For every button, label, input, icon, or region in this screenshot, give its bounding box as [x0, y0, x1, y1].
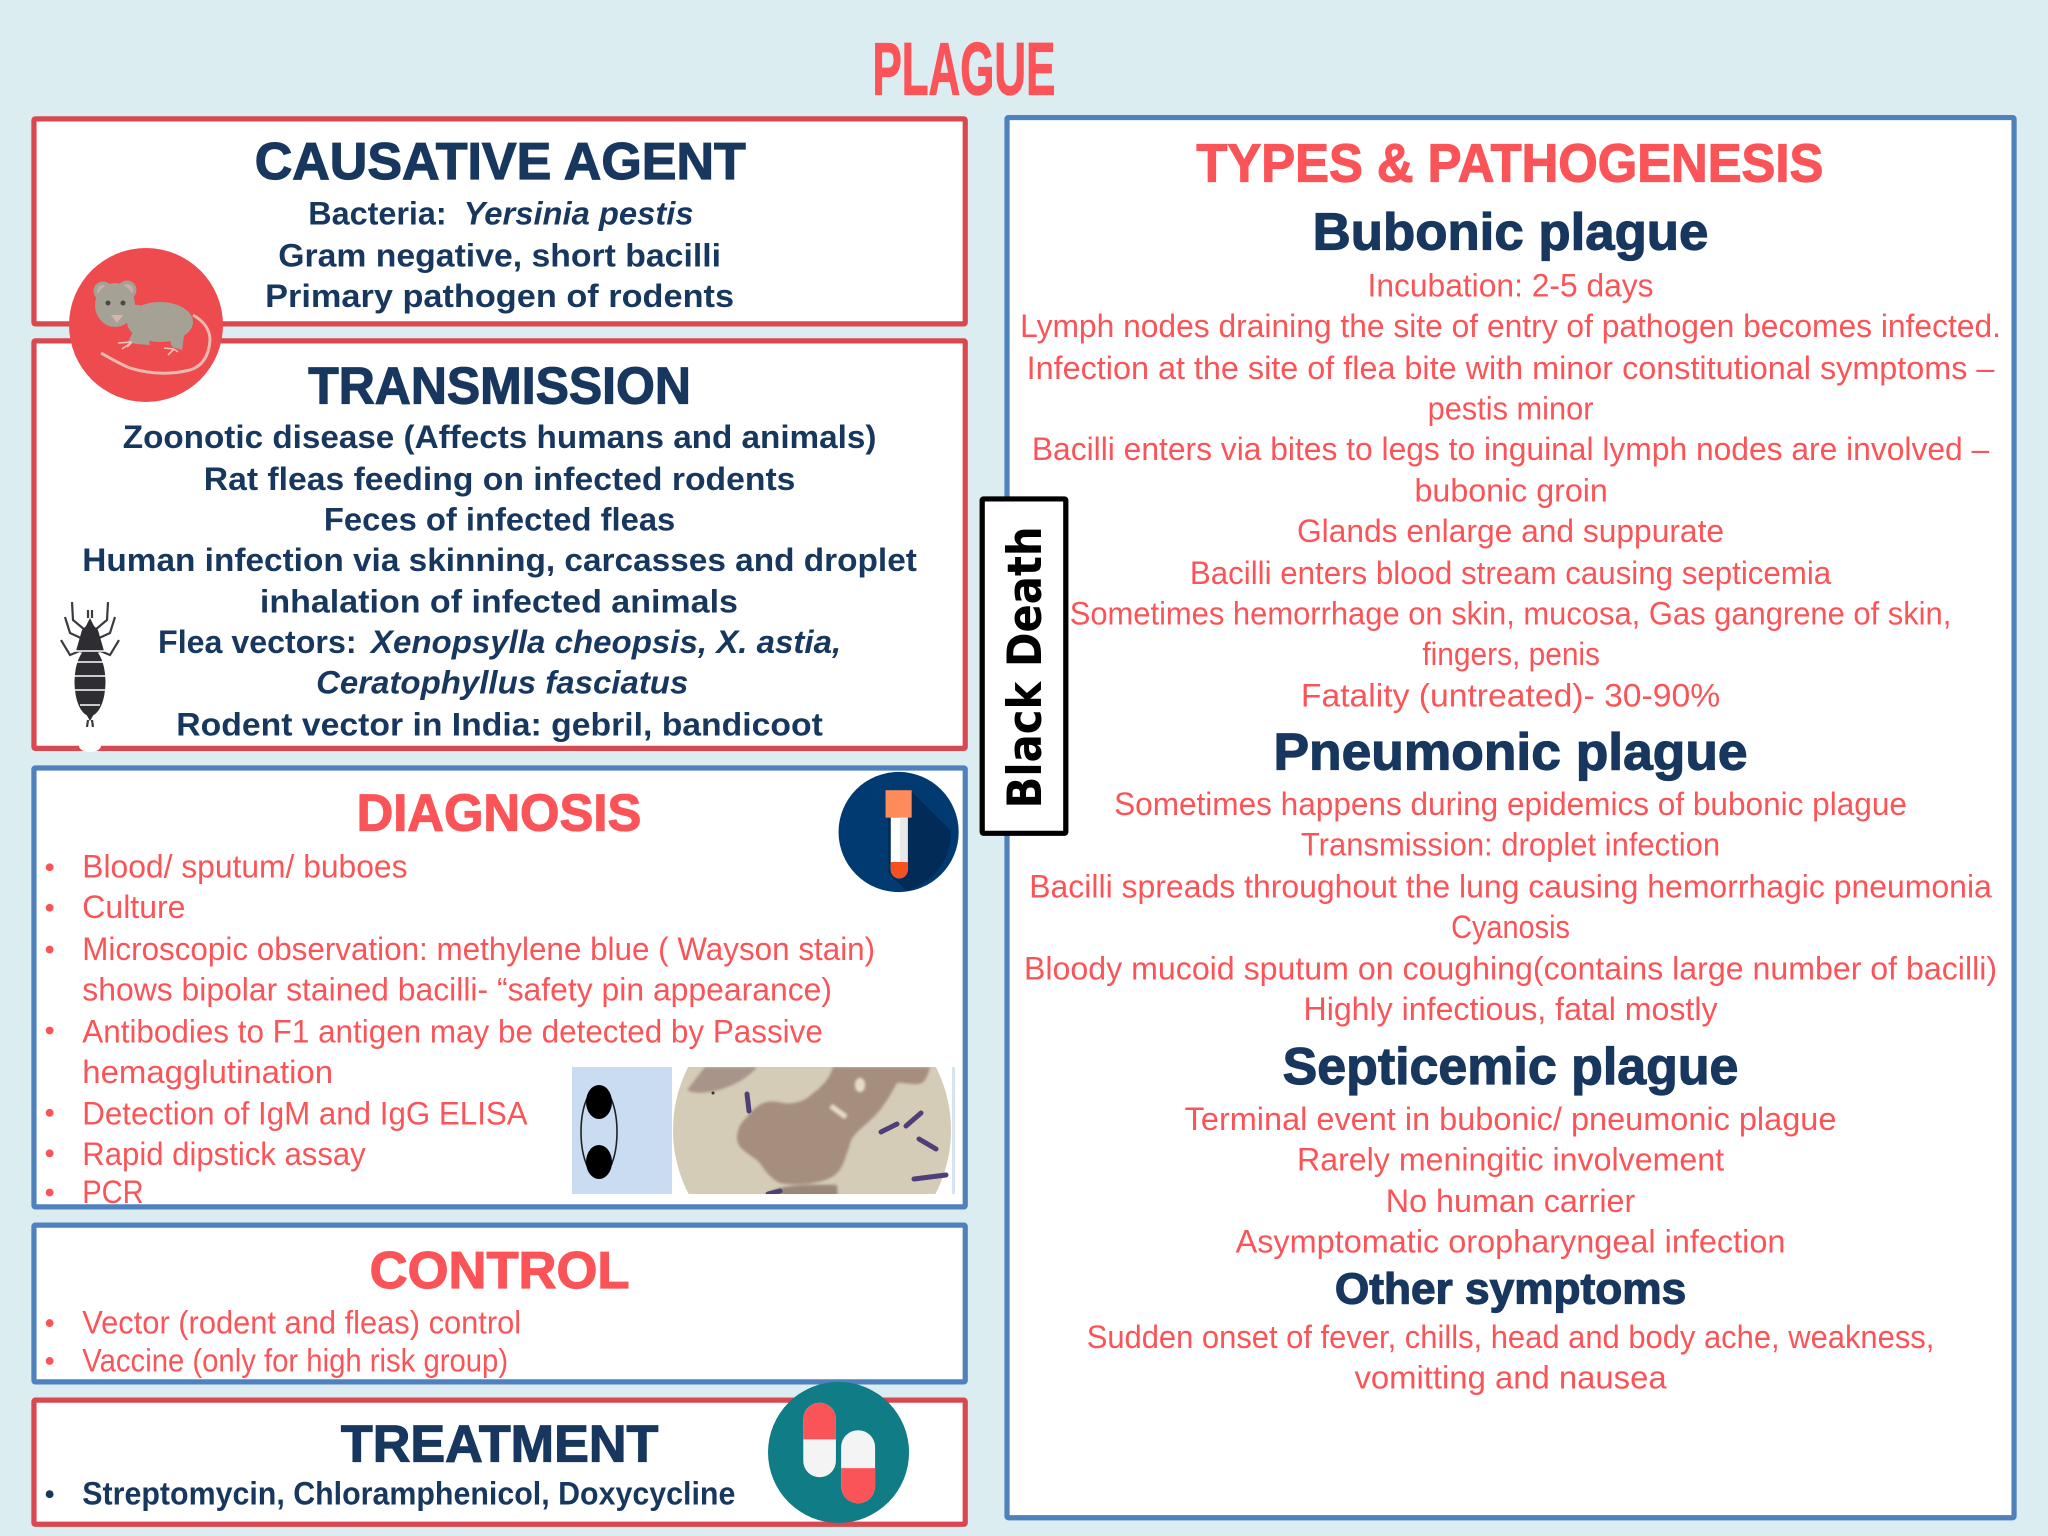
text: pneumonic plague details: Highly infectious, fatal mostly — [1304, 990, 1718, 1027]
text: bubonic plague details: pestis minor — [1428, 389, 1594, 426]
list: diagnostic methods — [46, 848, 875, 1210]
text: transmission details: Xenopsylla cheopsis, X. astia, — [369, 623, 841, 660]
list: diagnostic methods: Culture — [82, 888, 185, 925]
icon: flea — [61, 602, 119, 752]
text: transmission details: Flea vectors: — [158, 623, 357, 660]
panel: control — [34, 1225, 965, 1382]
label: black death: Black Death — [998, 526, 1053, 808]
text: septicemic plague details — [1185, 1100, 1836, 1260]
text: bubonic plague details — [1020, 266, 2001, 714]
text: bubonic plague details: Lymph nodes draining the site of entry of pathogen becomes infected. — [1020, 307, 2001, 344]
subheading: pneumonic plague: Pneumonic plague — [1273, 723, 1748, 781]
text: septicemic plague details: Asymptomatic oropharyngeal infection — [1236, 1223, 1785, 1260]
icon: mouse — [69, 248, 223, 402]
text: transmission details: Ceratophyllus fasciatus — [316, 664, 688, 701]
list: diagnostic methods: Blood/ sputum/ buboes — [82, 848, 408, 885]
text: bubonic plague details: fingers, penis — [1422, 635, 1600, 672]
text: other symptoms details: Sudden onset of fever, chills, head and body ache, weakness, — [1087, 1318, 1934, 1355]
text: transmission details: Human infection via skinning, carcasses and droplet — [82, 541, 917, 578]
text: pneumonic plague details: Sometimes happens during epidemics of bubonic plague — [1114, 785, 1907, 822]
text: causative agent details: Primary pathogen of rodents — [265, 277, 734, 314]
panel: diagnosis — [31, 765, 968, 1210]
text: bubonic plague details: Bacilli enters via bites to legs to inguinal lymph nodes are involved – — [1032, 430, 1990, 467]
text: causative agent details: Yersinia pestis — [464, 195, 694, 232]
text: causative agent details — [265, 195, 734, 314]
text: pneumonic plague details: Transmission: droplet infection — [1301, 826, 1720, 863]
panel: causative agent — [34, 119, 965, 324]
text: transmission details: Feces of infected fleas — [324, 500, 675, 537]
text: transmission details: Zoonotic disease (Affects humans and animals) — [123, 418, 876, 455]
image: safety pin diagram — [572, 1067, 672, 1194]
text: pneumonic plague details: Bloody mucoid sputum on coughing(contains large number of bacilli) — [1024, 950, 1997, 987]
title: PLAGUE — [872, 28, 1055, 111]
text: septicemic plague details: Terminal event in bubonic/ pneumonic plague — [1185, 1100, 1836, 1137]
panel: types and pathogenesis — [1007, 118, 2014, 1518]
heading: diagnosis: DIAGNOSIS — [357, 785, 641, 843]
heading: causative agent: CAUSATIVE AGENT — [255, 133, 746, 191]
subheading: bubonic plague: Bubonic plague — [1313, 203, 1708, 261]
section: other symptoms — [1087, 1266, 1934, 1395]
heading: transmission: TRANSMISSION — [308, 358, 691, 416]
list: control measures: Vaccine (only for high risk group) — [82, 1341, 508, 1378]
list: diagnostic methods: Rapid dipstick assay — [82, 1135, 366, 1172]
panel: treatment — [34, 1382, 965, 1524]
heading: types and pathogenesis: TYPES & PATHOGENESIS — [1196, 135, 1823, 194]
text: bubonic plague details: Sometimes hemorrhage on skin, mucosa, Gas gangrene of skin, — [1070, 594, 1951, 631]
image: micrograph of bipolar stained bacilli — [673, 1067, 955, 1194]
list: treatment drugs: Streptomycin, Chloramphenicol, Doxycycline — [82, 1475, 735, 1512]
text: bubonic plague details: Bacilli enters blood stream causing septicemia — [1190, 554, 1832, 591]
section: pneumonic plague — [1024, 723, 1997, 1027]
text: bubonic plague details: Incubation: 2-5 days — [1368, 266, 1654, 303]
text: transmission details: Rat fleas feeding on infected rodents — [204, 460, 795, 497]
icon: test tube — [839, 772, 959, 892]
list: diagnostic methods: Microscopic observation: methylene blue ( Wayson stain) — [82, 930, 875, 967]
text: other symptoms details — [1087, 1318, 1934, 1395]
subheading: other symptoms: Other symptoms — [1335, 1266, 1686, 1314]
list: diagnostic methods: Antibodies to F1 antigen may be detected by Passive — [82, 1012, 823, 1049]
label: black death — [982, 499, 1066, 833]
text: bubonic plague details: Infection at the site of flea bite with minor constitutional symptoms – — [1027, 349, 1995, 386]
text: causative agent details: Bacteria: — [308, 195, 447, 232]
text: transmission details: Rodent vector in India: gebril, bandicoot — [176, 705, 823, 742]
text: causative agent details: Gram negative, short bacilli — [278, 236, 721, 273]
list: control measures: Vector (rodent and fleas) control — [82, 1304, 521, 1341]
text: pneumonic plague details — [1024, 785, 1997, 1027]
section: septicemic plague — [1185, 1038, 1836, 1260]
section: bubonic plague — [1020, 203, 2001, 714]
list: diagnostic methods: PCR — [82, 1173, 144, 1210]
text: septicemic plague details: No human carrier — [1386, 1182, 1635, 1219]
text: bubonic plague details: Glands enlarge and suppurate — [1297, 512, 1724, 549]
text: transmission details — [82, 418, 917, 742]
heading: control: CONTROL — [370, 1242, 630, 1300]
panel: transmission — [34, 341, 965, 752]
list: control measures — [46, 1304, 521, 1378]
icon: pills — [768, 1382, 909, 1523]
list: diagnostic methods: Detection of IgM and IgG ELISA — [82, 1095, 528, 1132]
heading: treatment: TREATMENT — [341, 1416, 658, 1474]
text: bubonic plague details: bubonic groin — [1415, 472, 1608, 509]
text: pneumonic plague details: Cyanosis — [1451, 908, 1570, 945]
text: pneumonic plague details: Bacilli spreads throughout the lung causing hemorrhagic pneumonia — [1029, 867, 1993, 904]
subheading: septicemic plague: Septicemic plague — [1283, 1038, 1738, 1096]
list: diagnostic methods: hemagglutination — [82, 1053, 333, 1090]
text: bubonic plague details: Fatality (untreated)- 30-90% — [1301, 677, 1720, 714]
text: transmission details: inhalation of infected animals — [260, 583, 738, 620]
text: other symptoms details: vomitting and nausea — [1354, 1358, 1667, 1395]
text: septicemic plague details: Rarely meningitic involvement — [1297, 1140, 1724, 1177]
list: diagnostic methods: shows bipolar stained bacilli- “safety pin appearance) — [82, 970, 832, 1007]
